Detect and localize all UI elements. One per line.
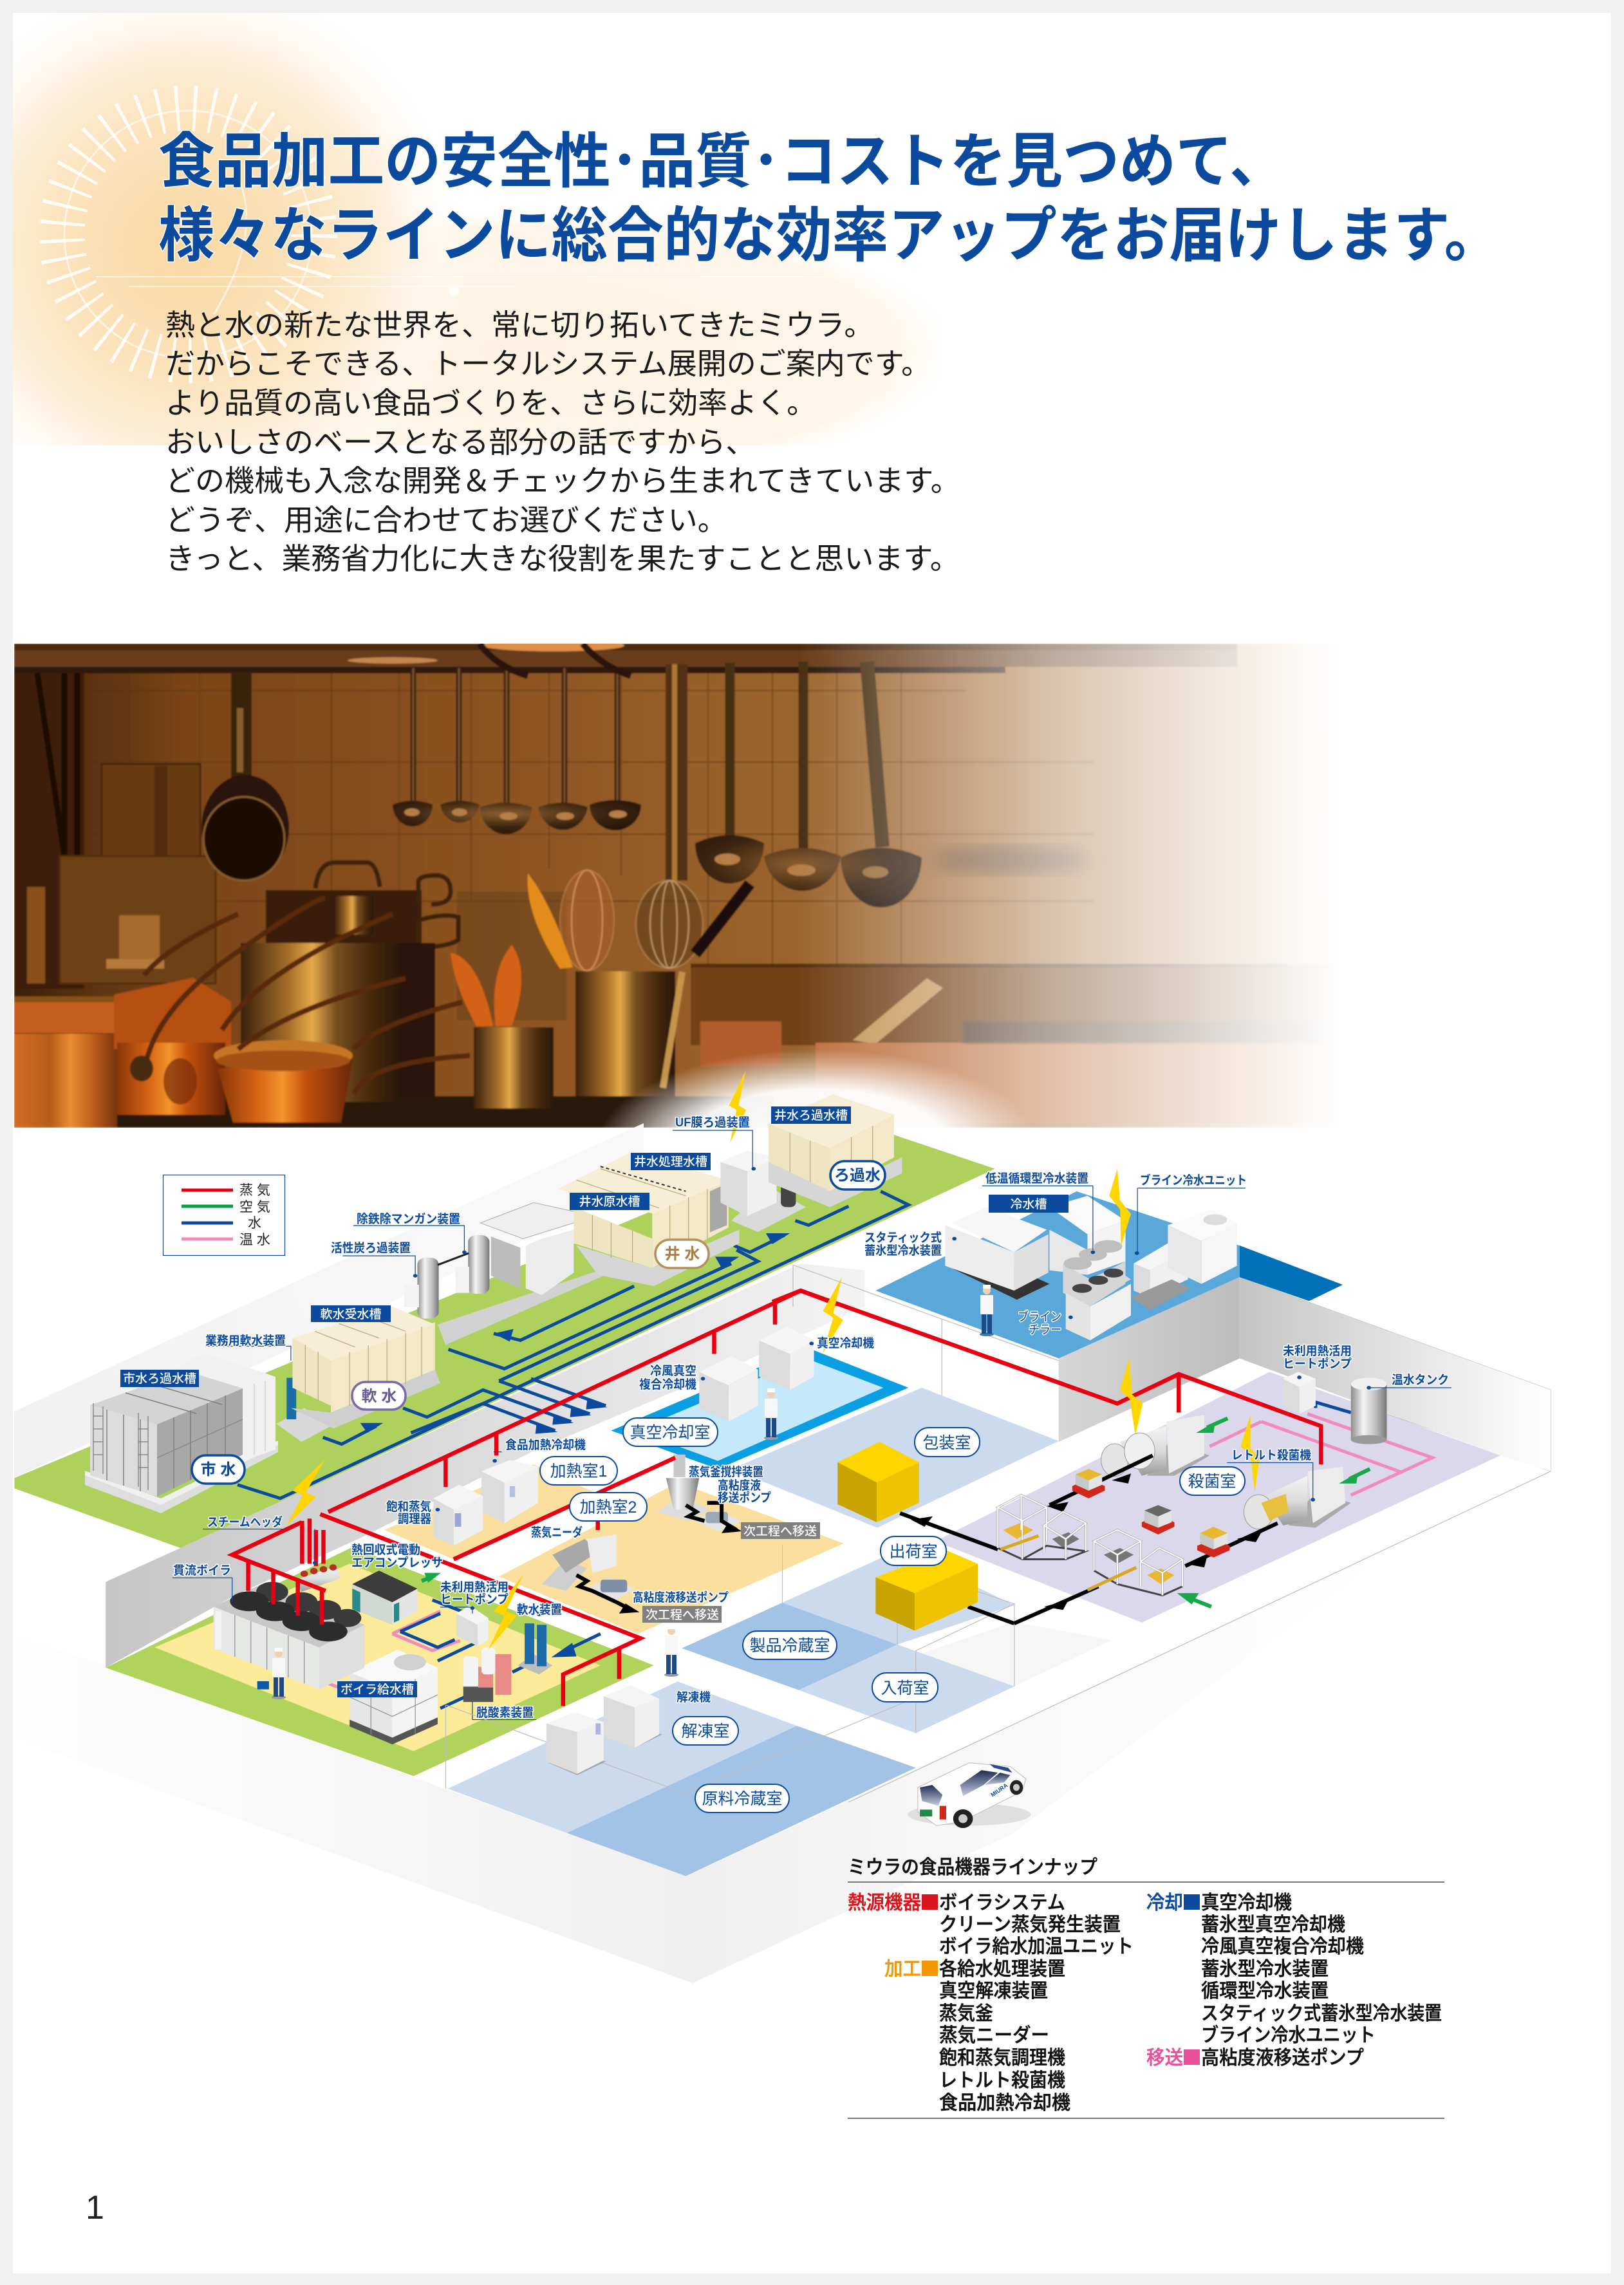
copper pots [14, 898, 470, 1128]
steam header [296, 1566, 341, 1592]
equipment labels: 蒸気釜撹拌装置 [689, 1465, 763, 1479]
equipment labels: 未利用熱活用 [1283, 1344, 1352, 1358]
deoxygenator [463, 1647, 511, 1702]
equipment labels: 複合冷却機 [639, 1377, 696, 1392]
tank tags: 軟水受水槽 [320, 1307, 382, 1321]
building footprint [106, 1287, 1551, 1876]
equipment labels: 未利用熱活用 [440, 1580, 509, 1594]
warm water pipes [1209, 1402, 1432, 1495]
room labels: 加熱室1 [550, 1462, 607, 1480]
conveyor lines [900, 1455, 1278, 1623]
pipe legend [163, 1175, 285, 1255]
tank tags [120, 1106, 1069, 1697]
water source bubbles [192, 1161, 885, 1484]
viscous liquid pumps [587, 1509, 742, 1602]
cold room dark strip [1240, 1245, 1343, 1301]
lineup rule top [848, 1881, 1444, 1883]
room labels: 加熱室2 [580, 1498, 637, 1516]
equipment labels: 蒸気ニーダ [531, 1525, 583, 1540]
intro text: どうぞ、用途に合わせてお選びください。 [165, 503, 727, 537]
back counter and bowl [691, 965, 1334, 1123]
equipment labels: 真空冷却機 [817, 1336, 874, 1350]
city water filtered tank [85, 1353, 278, 1513]
pipe legend: 蒸 気 [239, 1183, 270, 1198]
sunburst glow background [13, 13, 943, 445]
product cold room floor [682, 1603, 897, 1690]
next process tags [642, 1522, 820, 1623]
raw material cold room floor [567, 1726, 916, 1876]
pipe legend: 水 [248, 1216, 261, 1231]
dispatch box [875, 1551, 978, 1630]
lineup list right: 循環型冷水装置 [1201, 1981, 1329, 2002]
title: 様々なラインに総合的な効率アップをお届けします。 [158, 202, 1500, 269]
intro text: だからこそできる、トータルシステム展開のご案内です。 [165, 347, 931, 380]
equipment labels: チラー [1029, 1323, 1061, 1337]
room labels: 解凍室 [681, 1722, 730, 1740]
hanging ladles [393, 644, 922, 908]
steam kneader [542, 1534, 617, 1591]
cold room floor [875, 1191, 1240, 1358]
lineup list left: 熱源機器 [848, 1892, 921, 1914]
next process tags: 次工程へ移送 [646, 1608, 719, 1622]
receiving room floor [799, 1645, 1014, 1733]
pipe legend: 空 気 [239, 1200, 270, 1215]
equipment labels: 低温循環型冷水装置 [985, 1171, 1088, 1186]
iron removal and filter units [404, 1202, 606, 1345]
equipment labels: 調理器 [398, 1512, 431, 1526]
kitchen photo [14, 644, 1318, 1128]
shipping box [837, 1442, 919, 1522]
heat pump [456, 1605, 489, 1646]
worker 4 [980, 1285, 994, 1336]
pallets and carts [1072, 1469, 1230, 1558]
service van [908, 1763, 1031, 1828]
equipment labels: 高粘度液 [718, 1478, 761, 1493]
equipment labels: 飽和蒸気 [386, 1499, 431, 1514]
dark counter [14, 1096, 774, 1128]
room labels: 真空冷却室 [630, 1424, 711, 1442]
tool box [257, 1681, 269, 1690]
back jars [27, 764, 216, 984]
worker 3 [664, 1625, 678, 1677]
equipment labels: 活性炭ろ過装置 [331, 1241, 411, 1255]
lineup list left: 真空解凍装置 [939, 1981, 1048, 2002]
intro text [165, 308, 960, 575]
equipment labels: ブライン冷水ユニット [1140, 1173, 1247, 1188]
title: 食品加工の安全性･品質･コストを見つめて、 [158, 128, 1286, 195]
building outline [793, 1265, 1551, 1802]
red steam pipes [232, 1291, 837, 1706]
next process tags: 次工程へ移送 [743, 1524, 817, 1538]
vacuum cooling room inner [635, 1358, 883, 1461]
water source bubbles: ろ過水 [834, 1167, 881, 1184]
boiler room green floor [106, 1547, 654, 1776]
equipment labels: ヒートポンプ [1283, 1356, 1352, 1371]
lineup list left: ボイラシステム [939, 1892, 1065, 1914]
saturated steam cooker [433, 1485, 483, 1546]
red steam pipes right [772, 1291, 1321, 1464]
hanging skimmer pans [201, 672, 289, 881]
tank tags: 井水ろ過水槽 [774, 1108, 848, 1123]
lineup list right: 蓄氷型真空冷却機 [1201, 1914, 1345, 1935]
spatulas and whisks [451, 870, 750, 1108]
lineup list left [848, 1892, 1134, 2114]
equipment labels: 脱酸素装置 [476, 1706, 534, 1720]
room labels: 殺菌室 [1188, 1473, 1237, 1491]
factory floor plan, right half [732, 1169, 1551, 1802]
boiler feed tank [350, 1650, 438, 1744]
lineup list right [1146, 1892, 1442, 2069]
equipment labels: 温水タンク [1392, 1373, 1449, 1387]
brine chiller [1066, 1268, 1131, 1340]
food heating-cooling machine [481, 1460, 538, 1523]
lineup list left: ボイラ給水加温ユニット [939, 1936, 1134, 1957]
lineup list right: ブライン冷水ユニット [1201, 2025, 1376, 2046]
lineup rule bottom [848, 2118, 1444, 2119]
brine water unit [1131, 1241, 1191, 1310]
equipment labels: UF膜ろ過装置 [675, 1115, 750, 1130]
tank tags: 井水原水槽 [579, 1195, 640, 1209]
heating room 1 floor [384, 1464, 598, 1560]
lineup list right: 蓄氷型冷水装置 [1201, 1959, 1329, 1980]
leader lines and dots left [173, 1130, 756, 1720]
lineup list right: 冷風真空複合冷却機 [1201, 1936, 1364, 1957]
retort sterilizer 1 [1101, 1415, 1209, 1476]
tank tags: ボイラ給水槽 [341, 1683, 414, 1697]
glass jar [457, 891, 566, 1020]
blue pipes upper [238, 1191, 908, 1498]
electricity bolts left [286, 1071, 746, 1650]
vacuum cooling room floor [611, 1347, 908, 1469]
room labels: 包装室 [922, 1434, 971, 1452]
lineup list left: 飽和蒸気調理機 [939, 2047, 1065, 2069]
thawing machine 2 [604, 1685, 662, 1748]
equipment labels [173, 1115, 1449, 1720]
static ice water chiller [945, 1207, 1049, 1300]
tank tags: 井水処理水槽 [634, 1155, 707, 1169]
equipment labels: スチームヘッダ [207, 1515, 283, 1529]
lineup list left: クリーン蒸気発生装置 [939, 1914, 1121, 1935]
lineup list left: レトルト殺菌機 [939, 2070, 1065, 2091]
lineup list right: 真空冷却機 [1201, 1892, 1292, 1914]
tank tags: 市水ろ過水槽 [123, 1372, 196, 1386]
thawing machine 1 [546, 1712, 606, 1775]
water source bubbles: 市 水 [201, 1461, 236, 1478]
equipment labels: 軟水装置 [517, 1603, 562, 1617]
room grid lines [445, 1545, 1014, 1876]
shipping room floor [782, 1550, 1014, 1645]
hot water tank [1351, 1378, 1386, 1444]
wall right [1240, 1277, 1551, 1471]
room labels [540, 1418, 1245, 1813]
steam kettle [657, 1455, 710, 1521]
lineup list right: 冷却 [1146, 1892, 1183, 1914]
vacuum cooler units [699, 1327, 814, 1422]
well water raw tank [558, 1153, 739, 1286]
room labels: 入荷室 [881, 1679, 929, 1697]
equipment labels: 業務用軟水装置 [205, 1334, 286, 1348]
green utility strip [14, 1124, 995, 1548]
intro text: どの機械も入念な開発＆チェックから生まれてきています。 [165, 464, 960, 498]
factory floor plan, left half [14, 1071, 995, 1776]
heating room 2 floor [499, 1482, 844, 1634]
softener and soft water tank [277, 1307, 440, 1442]
equipment labels: 食品加熱冷却機 [505, 1438, 586, 1452]
equipment labels: 解凍機 [677, 1690, 711, 1704]
tank tags: 冷水槽 [1010, 1197, 1047, 1211]
back wall behind tanks [14, 1123, 644, 1478]
equipment labels: エアコンプレッサ [351, 1556, 443, 1570]
compressor [352, 1571, 417, 1625]
lineup list right: 高粘度液移送ポンプ [1201, 2047, 1364, 2069]
ground shadow [14, 1532, 1416, 1983]
packing frames [998, 1495, 1182, 1596]
room labels: 原料冷蔵室 [702, 1790, 783, 1808]
thawing room floor [448, 1681, 797, 1833]
room labels: 製品冷蔵室 [749, 1637, 830, 1655]
equipment labels: 冷風真空 [650, 1364, 696, 1378]
intro text: 熱と水の新たな世界を、常に切り拓いてきたミウラ。 [165, 308, 873, 342]
well filtered tank [769, 1094, 902, 1207]
worker 1 [764, 1388, 778, 1440]
equipment labels: 蓄氷型冷水装置 [864, 1244, 942, 1258]
cold storage rooms [445, 1545, 1031, 1876]
lineup list left: 各給水処理装置 [939, 1959, 1065, 1980]
wall below cold room [1059, 1277, 1240, 1442]
equipment labels: レトルト殺菌機 [1231, 1448, 1311, 1462]
boiler room yellow floor [154, 1564, 601, 1751]
grey wall band [106, 1264, 864, 1668]
page number: 1 [86, 2189, 104, 2226]
lineup list right: 移送 [1146, 2047, 1183, 2069]
once-through boilers [214, 1582, 364, 1690]
retort sterilizer 2 [1244, 1467, 1351, 1529]
equipment labels: 移送ポンプ [718, 1490, 771, 1505]
lineup heading: ミウラの食品機器ラインナップ [848, 1857, 1097, 1878]
sterilising room floor [935, 1372, 1500, 1623]
intro text: より品質の高い食品づくりを、さらに効率よく。 [165, 386, 816, 420]
equipment labels: スタティック式 [864, 1231, 942, 1245]
van lettering: MIURA [989, 1782, 1009, 1798]
water source bubbles: 軟 水 [362, 1388, 397, 1405]
intro text: きっと、業務省力化に大きな役割を果たすことと思います。 [165, 542, 960, 575]
equipment labels: 貫流ボイラ [173, 1563, 231, 1578]
water source bubbles: 井 水 [665, 1245, 700, 1263]
leader lines and dots right [809, 1186, 1451, 1502]
lineup list left: 蒸気釜 [939, 2003, 993, 2024]
lineup list left: 食品加熱冷却機 [939, 2093, 1070, 2114]
product transfer lines [577, 1503, 742, 1614]
air arrows [1177, 1419, 1370, 1607]
lower warm water and water pipes [328, 1573, 601, 1708]
room labels: 出荷室 [889, 1543, 938, 1561]
pipe legend: 温 水 [239, 1233, 270, 1247]
UF membrane unit and drum [720, 1151, 806, 1232]
water softener [518, 1623, 552, 1674]
packing room floor [732, 1388, 1059, 1527]
low temperature circulating chiller [1063, 1240, 1126, 1307]
worker 2 [272, 1648, 286, 1699]
ice water tank right [1168, 1209, 1237, 1284]
lineup list left: 加工 [884, 1959, 921, 1980]
steel stock pots [241, 863, 458, 1102]
equipment labels: 除鉄除マンガン装置 [357, 1212, 460, 1226]
electricity bolts right [823, 1169, 1260, 1491]
equipment labels: 熱回収式電動 [351, 1543, 420, 1557]
cold water tank [1049, 1196, 1126, 1275]
back room pale floor [826, 1622, 1112, 1733]
lineup list left: 蒸気ニーダー [939, 2025, 1049, 2046]
intro text: おいしさのベースとなる部分の話ですから、 [165, 425, 755, 459]
equipment labels: ヒートポンプ [440, 1592, 509, 1607]
heat pump right [1283, 1372, 1316, 1414]
lineup list right: スタティック式蓄氷型冷水装置 [1201, 2003, 1442, 2024]
equipment labels: 高粘度液移送ポンプ [633, 1590, 729, 1605]
title [158, 128, 1500, 269]
equipment labels: ブライン [1018, 1309, 1061, 1324]
